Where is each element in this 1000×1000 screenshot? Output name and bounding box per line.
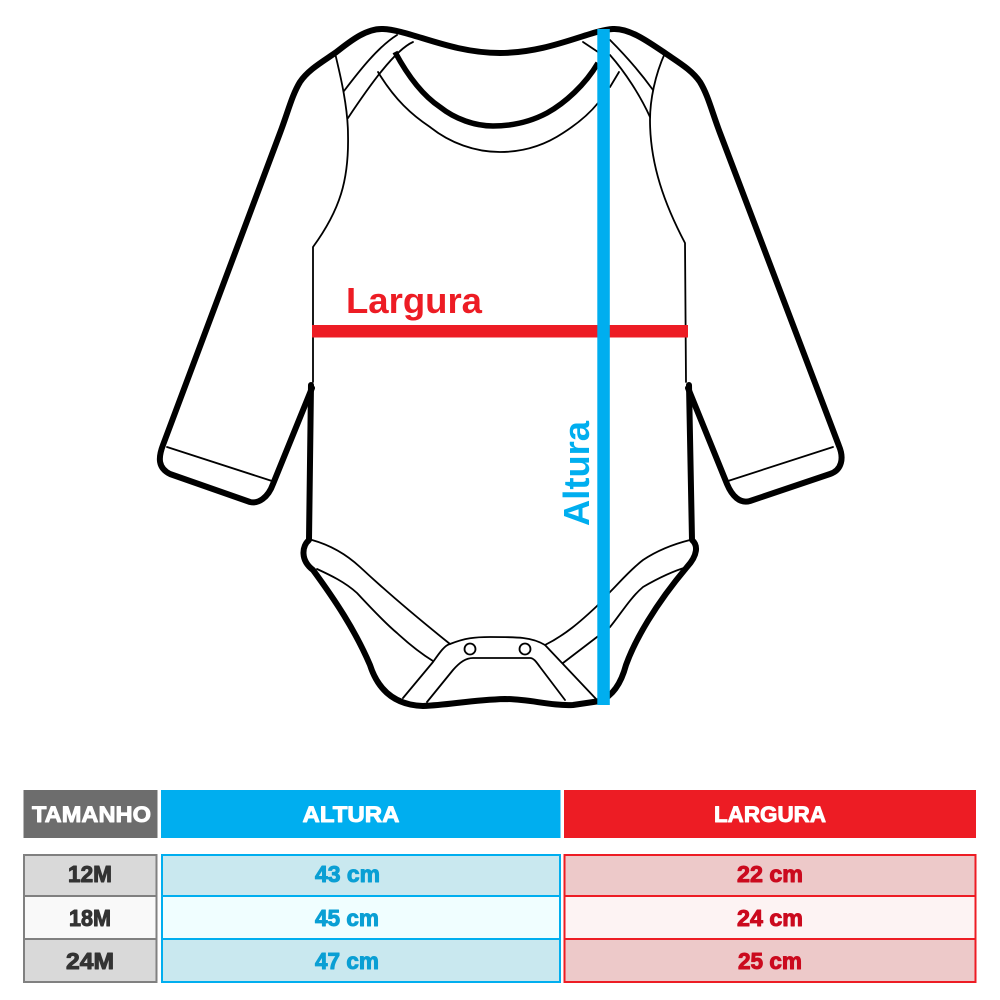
snap buttons	[464, 644, 530, 654]
header: ALTURA	[161, 790, 560, 838]
bodysuit illustration	[160, 29, 842, 706]
label: Altura: Altura	[556, 420, 597, 526]
outline: body and crotch	[303, 385, 696, 706]
column: sizes: 18M	[69, 905, 111, 931]
column: sizes: 12M	[68, 861, 112, 887]
column: altura values: 47 cm	[315, 948, 379, 974]
neck opening	[395, 52, 598, 126]
column: largura values: 22 cm	[737, 861, 803, 887]
width measure line	[312, 325, 688, 338]
column: altura values: 43 cm	[315, 861, 380, 887]
outline: neck, shoulders and left sleeve	[160, 29, 613, 502]
column: altura values	[162, 855, 560, 982]
column: altura values: 45 cm	[315, 905, 379, 931]
header: TAMANHO	[24, 790, 158, 838]
size table	[24, 790, 976, 982]
header: TAMANHO: TAMANHO	[32, 802, 151, 827]
header: LARGURA: LARGURA	[714, 802, 826, 827]
header: LARGURA	[564, 790, 976, 838]
column: sizes: 24M	[66, 948, 114, 974]
column: sizes	[24, 855, 156, 982]
height measure line	[597, 29, 610, 705]
column: largura values: 25 cm	[738, 948, 802, 974]
column: largura values: 24 cm	[737, 905, 803, 931]
header: ALTURA: ALTURA	[302, 802, 400, 827]
column: largura values	[564, 855, 976, 982]
outline: right sleeve	[613, 29, 842, 502]
thin seams	[167, 35, 833, 702]
label: Largura: Largura	[346, 280, 483, 321]
